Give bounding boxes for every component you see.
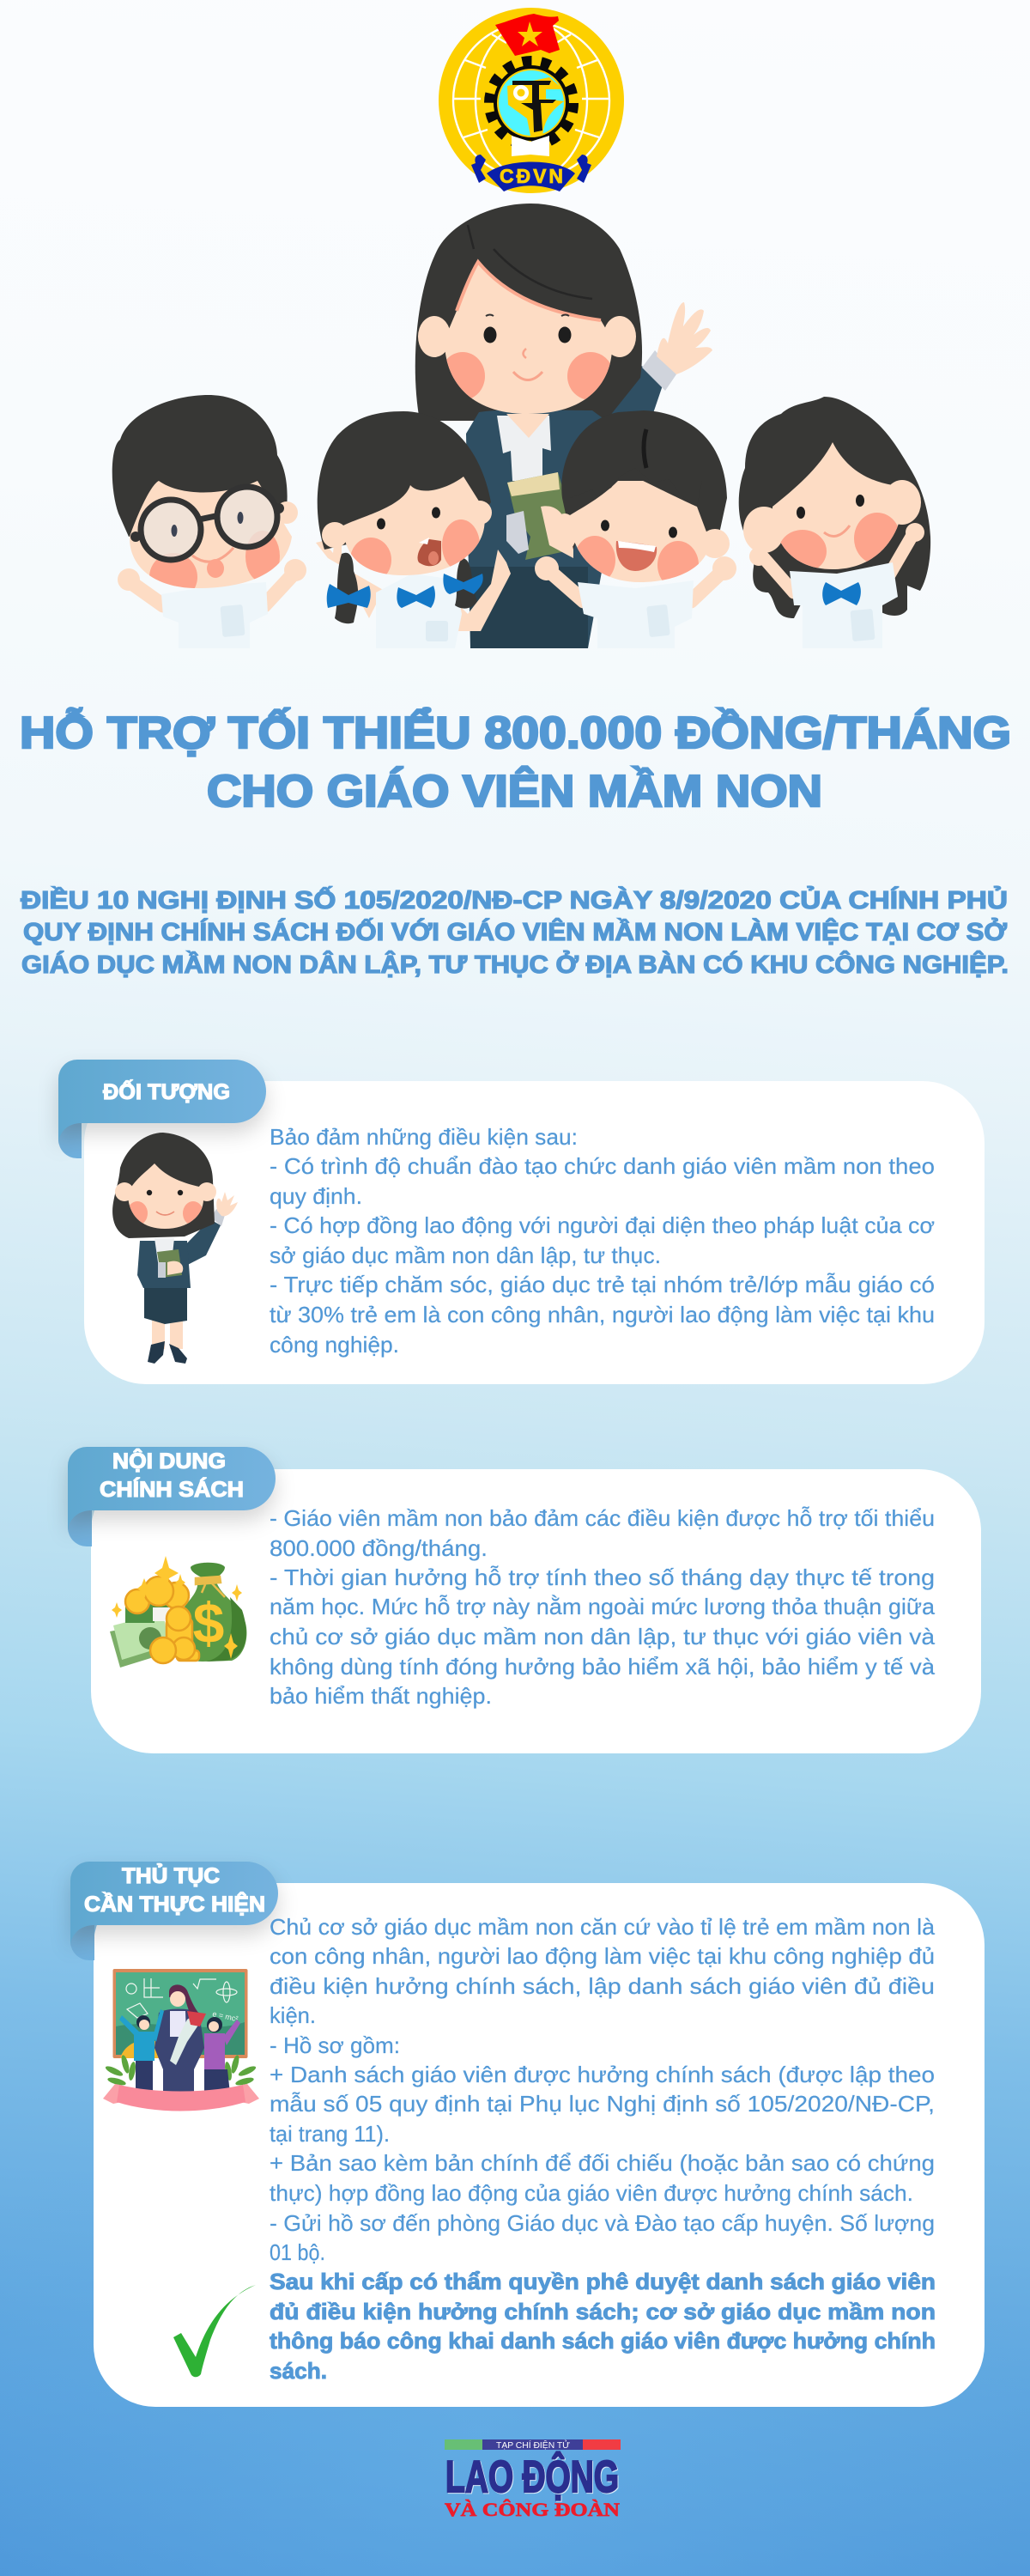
text 3: điều kiện hưởng chính sách, lập danh sách giáo viên đủ điều — [270, 1973, 935, 1999]
text 3: kiện. — [270, 2002, 316, 2028]
text 1: công nghiệp. — [270, 1332, 399, 1358]
text 3: mẫu số 05 quy định tại Phụ lục Nghị định số 105/2020/NĐ-CP, — [270, 2091, 935, 2117]
panel: đối tượng — [58, 1060, 985, 1384]
tab 2 — [68, 1447, 276, 1546]
subtitle: QUY ĐỊNH CHÍNH SÁCH ĐỐI VỚI GIÁO VIÊN MẦM NON LÀM VIỆC TẠI CƠ SỞ — [23, 917, 1007, 946]
card 1 — [84, 1081, 985, 1384]
panel: nội dung chính sách — [68, 1447, 981, 1753]
text 3: + Danh sách giáo viên được hưởng chính sách (được lập theo — [270, 2062, 935, 2087]
subtitle: ĐIỀU 10 NGHỊ ĐỊNH SỐ 105/2020/NĐ-CP NGÀY 8/9/2020 CỦA CHÍNH PHỦ — [21, 885, 1008, 914]
text 2: - Thời gian hưởng hỗ trợ tính theo số tháng dạy thực tế trong — [270, 1564, 935, 1590]
pupil 1: boy with glasses — [112, 395, 306, 648]
book in teacher's hands — [506, 472, 573, 560]
bold closing note: thông báo công khai danh sách giáo viên được hưởng chính — [270, 2328, 936, 2354]
subtitle — [21, 885, 1009, 979]
tab 3: THỦ TỤC — [122, 1862, 220, 1888]
text 1: - Trực tiếp chăm sóc, giáo dục trẻ tại nhóm trẻ/lớp mẫu giáo có — [270, 1272, 935, 1297]
bold closing note — [270, 2269, 936, 2384]
logo tagline: VÀ CÔNG ĐOÀN — [445, 2499, 620, 2520]
text 2: chủ cơ sở giáo dục mầm non dân lập, tư thục với giáo viên và — [270, 1624, 936, 1649]
tab 3: CẦN THỰC HIỆN — [84, 1891, 265, 1917]
face — [445, 262, 612, 414]
leaf sprigs — [105, 2054, 257, 2087]
text 2: năm học. Mức hỗ trợ này nằm ngoài mức lương thỏa thuận giữa — [270, 1594, 936, 1619]
text 2 — [270, 1505, 936, 1709]
footer logo: Tạp chí điện tử Lao Động và Công Đoàn — [445, 2439, 621, 2520]
panel: thủ tục cần thực hiện — [70, 1862, 985, 2407]
gear — [489, 61, 573, 145]
illustration: small teacher — [112, 1133, 238, 1364]
pupil 2: girl with braids — [316, 411, 511, 648]
logo wordmark: LAO ĐỘNG — [445, 2451, 619, 2502]
bold closing note: Sau khi cấp có thẩm quyền phê duyệt danh sách giáo viên — [270, 2269, 936, 2294]
text 3: + Bản sao kèm bản chính để đối chiếu (hoặc bản sao có chứng — [270, 2150, 935, 2176]
icon: green check mark — [173, 2285, 256, 2377]
text 1: từ 30% trẻ em là con công nhân, người lao động làm việc tại khu — [270, 1302, 935, 1327]
tab 3 — [70, 1862, 278, 1960]
flag — [495, 14, 560, 56]
teacher raised arm — [601, 302, 712, 421]
tab 1 — [58, 1060, 266, 1158]
subtitle: GIÁO DỤC MẦM NON DÂN LẬP, TƯ THỤC Ở ĐỊA BÀN CÓ KHU CÔNG NGHIỆP. — [21, 950, 1009, 979]
text 3: - Hồ sơ gồm: — [270, 2032, 400, 2058]
globe lines — [453, 22, 609, 179]
illustration: teacher and pupils at blackboard: e = mc² — [212, 2009, 239, 2023]
text 1 — [270, 1124, 935, 1358]
shirt collar — [497, 416, 551, 481]
braids — [335, 553, 358, 623]
tab 2: CHÍNH SÁCH — [100, 1477, 244, 1502]
ribbon — [103, 2084, 259, 2104]
text 1: sở giáo dục mầm non dân lập, tư thục. — [270, 1242, 661, 1268]
emblem disc — [439, 8, 624, 193]
card 2 — [91, 1469, 981, 1753]
text 3: thực) hợp đồng lao động của giáo viên được hưởng chính sách. — [270, 2180, 913, 2206]
text 3: - Gửi hồ sơ đến phòng Giáo dục và Đào tạo cấp huyện. Số lượng — [270, 2210, 935, 2236]
text 3: tại trang 11). — [270, 2121, 390, 2147]
pupil 4: girl with long hair — [739, 397, 930, 648]
teacher — [415, 204, 712, 648]
logo colour bar — [445, 2439, 621, 2451]
icon: money bag, coins and banknotes: $ — [193, 1591, 224, 1655]
teacher jacket and skirt — [466, 410, 618, 648]
logo: Công đoàn Việt Nam emblem — [439, 8, 624, 193]
illustration: teacher and pupils at blackboard — [103, 1969, 259, 2111]
bold closing note: đủ điều kiện hưởng chính sách; cơ sở giáo dục mầm non — [270, 2299, 936, 2324]
glasses — [130, 487, 284, 560]
text 1: - Có hợp đồng lao động với người đại diện theo pháp luật của cơ — [270, 1212, 935, 1238]
text 2: 800.000 đồng/tháng. — [270, 1535, 488, 1561]
text 3 — [270, 1914, 936, 2265]
main title: HỖ TRỢ TỐI THIỂU 800.000 ĐỒNG/THÁNG — [20, 708, 1011, 758]
card 3 — [94, 1883, 985, 2407]
tab 2: NỘI DUNG — [112, 1448, 226, 1473]
illustration: teacher and four pupils — [112, 204, 930, 648]
text 3: 01 bộ. — [270, 2239, 325, 2265]
text 3: Chủ cơ sở giáo dục mầm non căn cứ vào tỉ lệ trẻ em mầm non là — [270, 1914, 936, 1940]
text 2: bảo hiểm thất nghiệp. — [270, 1683, 492, 1709]
main title: CHO GIÁO VIÊN MẦM NON — [207, 766, 822, 817]
text 3: con công nhân, người lao động làm việc tại khu công nghiệp đủ — [270, 1943, 935, 1969]
ears — [418, 316, 451, 357]
tab 1: ĐỐI TƯỢNG — [103, 1078, 230, 1104]
text 1: quy định. — [270, 1183, 362, 1209]
text 1: Bảo đảm những điều kiện sau: — [270, 1124, 578, 1150]
bold closing note: sách. — [270, 2358, 327, 2384]
icon: money bag, coins and banknotes — [110, 1556, 246, 1668]
text 2: - Giáo viên mầm non bảo đảm các điều kiện được hỗ trợ tối thiểu — [270, 1505, 935, 1531]
logo: Công đoàn Việt Nam emblem: CĐVN — [500, 165, 563, 187]
main title — [20, 708, 1011, 817]
blackboard figures — [119, 1984, 240, 2095]
teacher hair — [415, 204, 642, 421]
text 2: không dùng tính đóng hưởng bảo hiểm xã hội, bảo hiểm y tế và — [270, 1654, 936, 1680]
bangs — [570, 468, 702, 507]
book — [512, 136, 549, 156]
logo colour bar: TẠP CHÍ ĐIỆN TỬ — [496, 2439, 570, 2451]
text 1: - Có trình độ chuẩn đào tạo chức danh giáo viên mầm non theo — [270, 1153, 935, 1179]
ribbon with name — [487, 161, 575, 191]
pupil 3: boy — [535, 410, 736, 648]
